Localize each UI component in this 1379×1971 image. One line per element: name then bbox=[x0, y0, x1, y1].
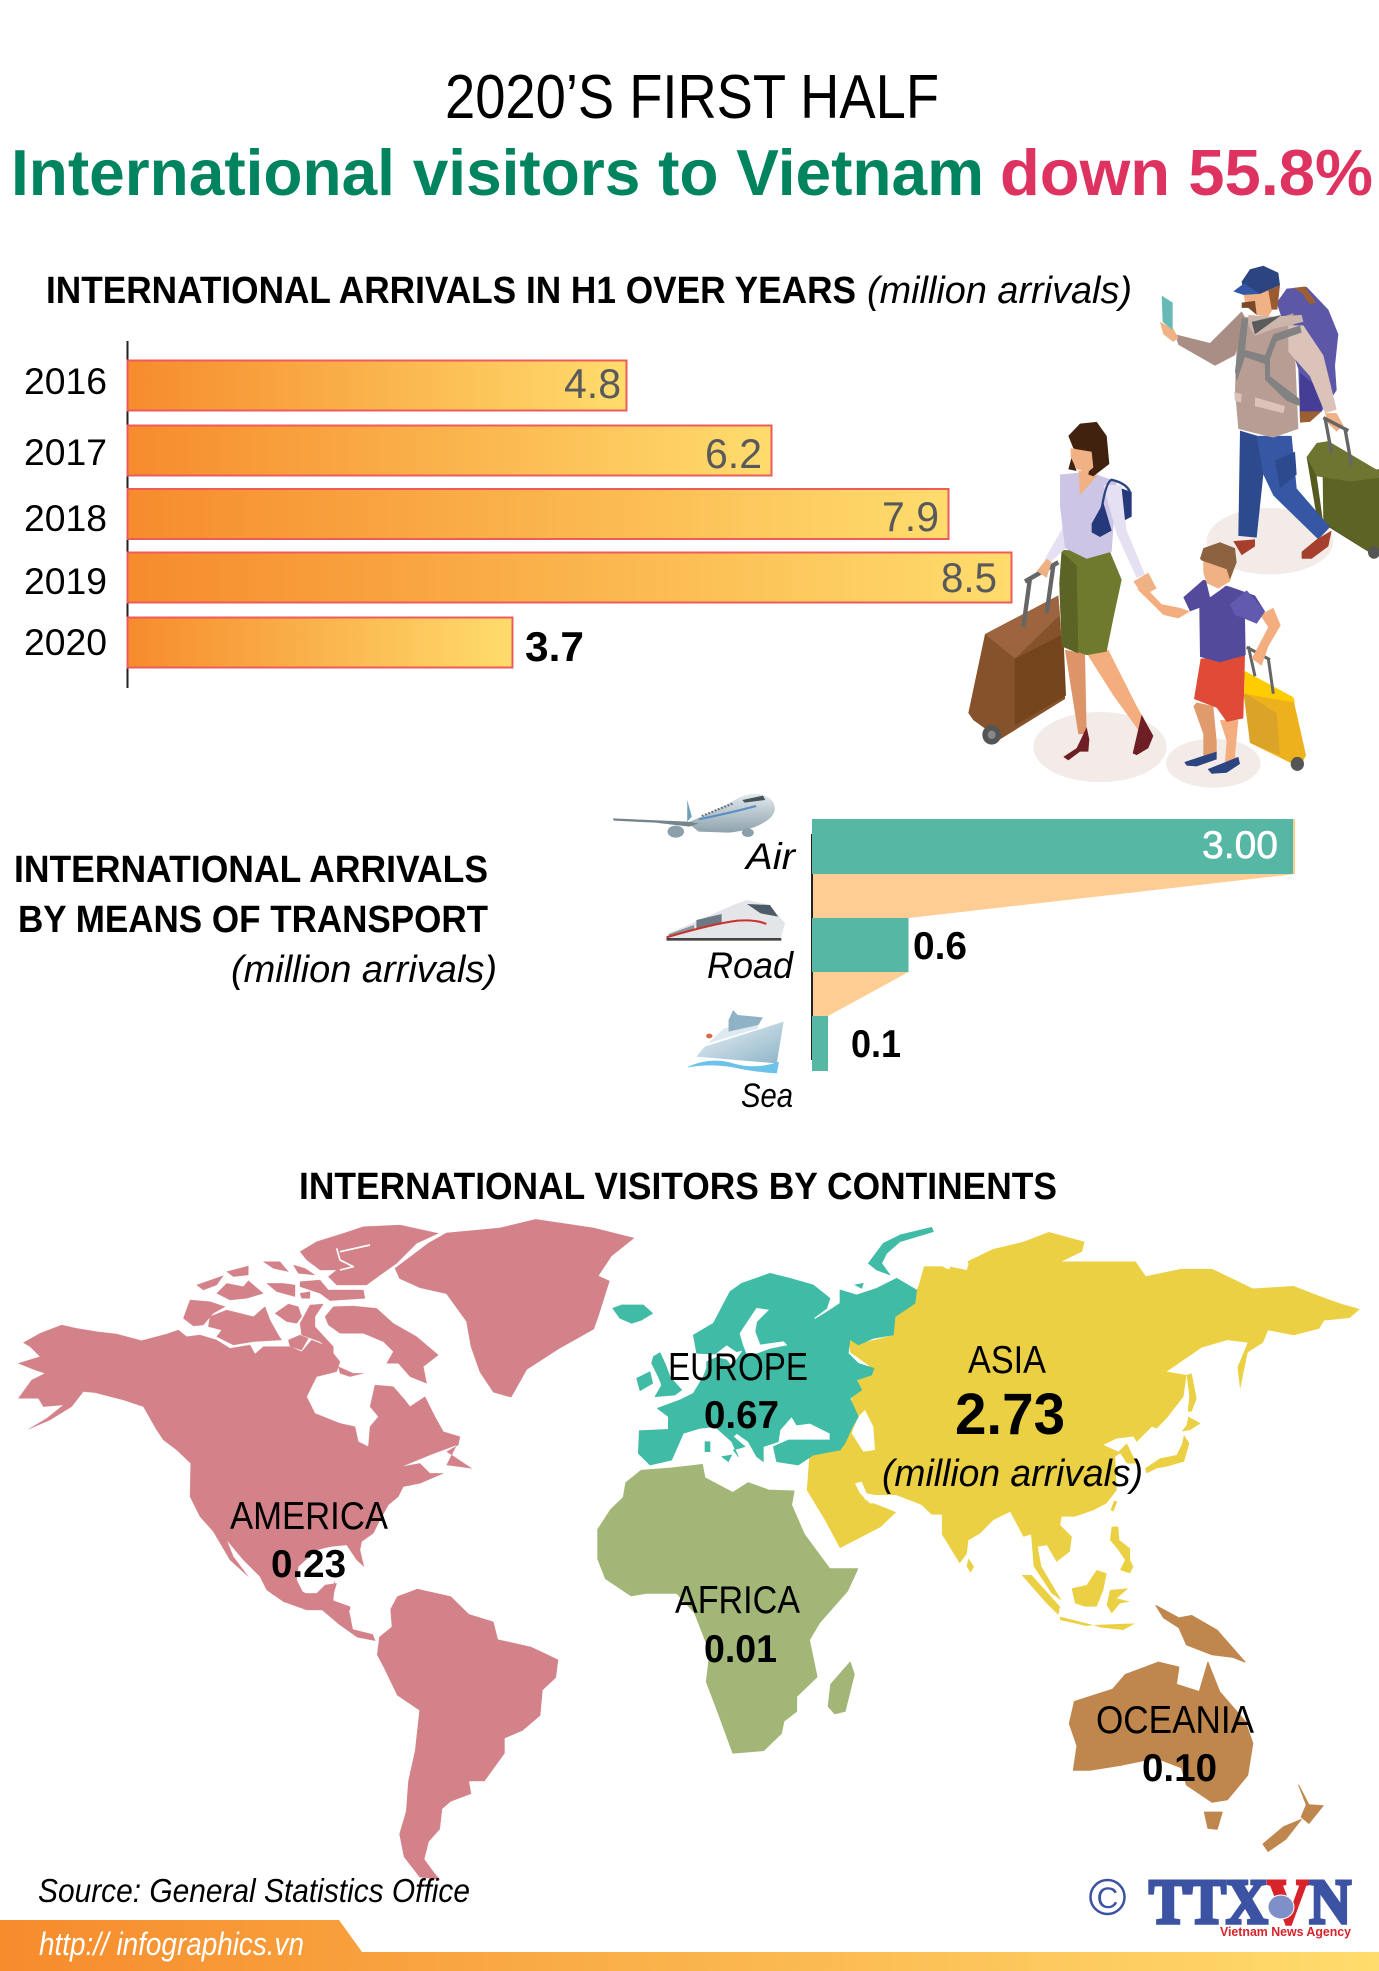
continent: Africa bbox=[598, 1465, 858, 1753]
label: America bbox=[230, 1495, 388, 1586]
heading: arrivals over years: (million arrivals) bbox=[867, 270, 1132, 312]
bar chart: arrivals by year: 7.9 bbox=[882, 493, 939, 540]
label: Asia: 2.73 bbox=[955, 1382, 1065, 1447]
bar chart: arrivals by year: 2020 bbox=[24, 622, 107, 663]
continent: America bbox=[18, 1219, 634, 1879]
label: Oceania: OCEANIA bbox=[1096, 1699, 1254, 1742]
funnel bar chart: transport: 3.00 bbox=[1202, 824, 1278, 867]
icon: ship bbox=[688, 1010, 784, 1073]
label: Asia: ASIA bbox=[968, 1339, 1046, 1382]
source note: Source: General Statistics Office bbox=[38, 1872, 470, 1909]
logo: TTXVN: Vietnam News Agency bbox=[1220, 1924, 1352, 1939]
title bbox=[11, 63, 1373, 209]
logo: TTXVN: C bbox=[1097, 1882, 1118, 1915]
label: Asia: (million arrivals) bbox=[882, 1453, 1143, 1495]
label: Oceania bbox=[1096, 1699, 1254, 1790]
heading: by means of transport: INTERNATIONAL ARRIVALS bbox=[14, 849, 488, 891]
label: Africa: 0.01 bbox=[704, 1628, 777, 1671]
label: Oceania: 0.10 bbox=[1142, 1747, 1217, 1790]
woman with suitcase bbox=[968, 422, 1157, 760]
icon: plane bbox=[613, 794, 775, 838]
icon: train bbox=[664, 900, 785, 941]
continent: Asia bbox=[807, 1232, 1360, 1630]
label: Europe: EUROPE bbox=[668, 1346, 808, 1389]
bar chart: arrivals by year: 2019 bbox=[24, 561, 107, 602]
label: Africa: AFRICA bbox=[675, 1579, 800, 1622]
funnel bar chart: transport: 0.6 bbox=[913, 925, 967, 968]
footer bar: http:// infographics.vn bbox=[39, 1926, 304, 1962]
funnel bar chart: transport: Road bbox=[707, 945, 794, 986]
bar chart: arrivals by year: 6.2 bbox=[705, 430, 762, 477]
bar chart: arrivals by year: 3.7 bbox=[525, 623, 584, 670]
label: America: 0.23 bbox=[271, 1543, 346, 1586]
title: 2020’S FIRST HALF bbox=[445, 63, 939, 132]
bar chart: arrivals by year: 8.5 bbox=[941, 554, 997, 601]
label: Europe: 0.67 bbox=[704, 1394, 779, 1437]
label: Africa bbox=[675, 1579, 800, 1671]
title: International visitors to Vietnam bbox=[11, 136, 984, 209]
funnel bar chart: transport bbox=[707, 819, 1295, 1115]
funnel bar chart: transport: Sea bbox=[741, 1077, 793, 1115]
bar chart: arrivals by year: 2017 bbox=[24, 432, 107, 473]
continent: Europe bbox=[613, 1227, 933, 1465]
heading: arrivals over years: INTERNATIONAL ARRIVALS IN H1 OVER YEARS bbox=[46, 270, 856, 312]
world map bbox=[18, 1219, 1360, 1879]
funnel bar chart: transport: 0.1 bbox=[851, 1023, 901, 1066]
heading: by continents: INTERNATIONAL VISITORS BY CONTINENTS bbox=[299, 1166, 1057, 1208]
bar chart: arrivals by year bbox=[24, 341, 1012, 688]
label: Europe bbox=[668, 1346, 808, 1437]
bar chart: arrivals by year: 2018 bbox=[24, 498, 107, 539]
heading: by means of transport bbox=[14, 849, 497, 991]
bar chart: arrivals by year: 2016 bbox=[24, 361, 107, 402]
logo: TTXVN: TTXVN bbox=[1149, 1867, 1351, 1937]
boy with suitcase bbox=[1137, 542, 1306, 774]
label: Asia bbox=[882, 1339, 1143, 1495]
bar chart: arrivals by year: 4.8 bbox=[564, 360, 621, 407]
man with backpack bbox=[1160, 266, 1379, 559]
illustration: travellers bbox=[968, 266, 1379, 788]
funnel bar chart: transport: Air bbox=[744, 836, 797, 877]
heading: by means of transport: BY MEANS OF TRANSPORT bbox=[18, 899, 488, 941]
title: down 55.8% bbox=[1000, 136, 1373, 209]
footer bar bbox=[0, 1920, 1379, 1971]
heading: by means of transport: (million arrivals) bbox=[231, 949, 497, 991]
continent: Oceania bbox=[1069, 1606, 1323, 1851]
label: America: AMERICA bbox=[230, 1495, 388, 1538]
